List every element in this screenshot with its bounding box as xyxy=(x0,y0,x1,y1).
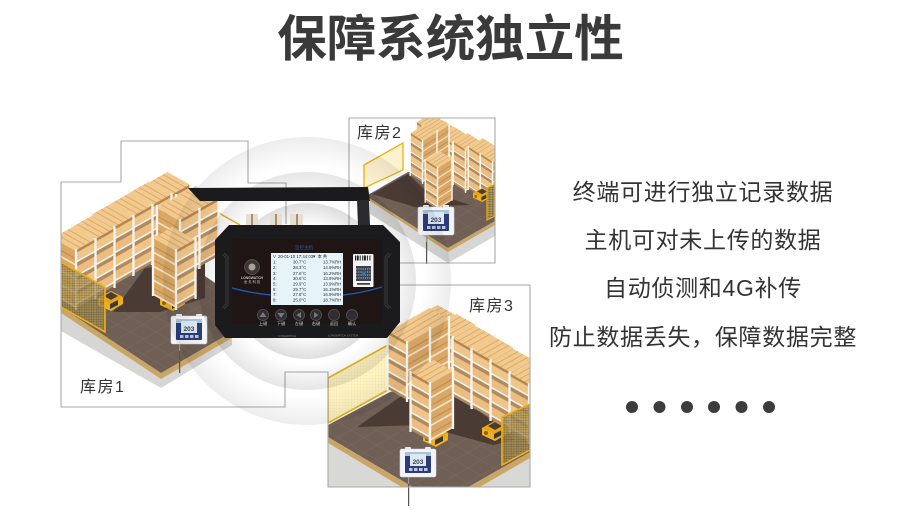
LCD screen: 30.6°C xyxy=(293,276,306,281)
barcode and QR label xyxy=(353,254,374,287)
text block: features: 终端可进行独立记录数据 xyxy=(573,179,833,205)
label: warehouse 1: 库房1 xyxy=(80,378,125,396)
text block: features: 防止数据丢失，保障数据完整 xyxy=(549,324,857,350)
device: central host xyxy=(188,187,400,338)
LCD screen: 18.7%RH xyxy=(323,298,341,302)
front panel xyxy=(232,239,382,324)
logo: 龙 戈 科 技 xyxy=(244,279,261,284)
LCD screen: 25.0°C xyxy=(293,298,306,302)
buttons: 左键 xyxy=(295,320,304,327)
logo xyxy=(241,260,264,284)
panel: warehouse 1 xyxy=(53,172,240,396)
LCD screen: 5: xyxy=(273,282,277,286)
LCD screen: 3: xyxy=(273,271,277,276)
LCD screen: 29.7°C xyxy=(293,287,306,292)
panel: warehouse 2 xyxy=(358,118,494,264)
sensor 3 xyxy=(400,447,436,506)
LCD screen: 13.9%RH xyxy=(323,282,341,286)
buttons: 上键 xyxy=(259,320,268,327)
device body xyxy=(215,225,400,338)
robot xyxy=(473,188,486,202)
LCD screen: ▼ 本 共 xyxy=(312,253,328,260)
warehouse 3 scene xyxy=(328,305,530,486)
fence xyxy=(487,184,495,220)
LCD screen: 16.9%RH xyxy=(323,292,341,297)
warehouse 1 scene xyxy=(53,172,240,388)
buttons: 确认 xyxy=(348,320,357,327)
LCD screen: 13.7%RH xyxy=(323,260,341,264)
buttons: 右键 xyxy=(312,320,321,327)
warehouse 2 scene xyxy=(363,118,494,262)
LCD screen: 1: xyxy=(273,260,277,264)
LCD screen: 20-01-10 17:44:03 xyxy=(278,254,314,259)
connectors xyxy=(246,214,303,226)
title: 保障系统独立性 xyxy=(277,12,624,67)
bottom port labels: LONGWATCH xyxy=(278,334,296,338)
robot xyxy=(98,291,123,311)
LCD screen: 27.8°C xyxy=(293,292,306,297)
fence xyxy=(61,262,105,332)
device name: 监控主机 xyxy=(295,244,313,251)
LCD screen: 6: xyxy=(273,287,277,292)
buttons xyxy=(258,310,358,327)
LCD screen: 7: xyxy=(273,292,277,297)
LCD screen: V xyxy=(273,254,276,259)
buttons: 下键 xyxy=(277,320,286,327)
text block: features: 主机可对未上传的数据 xyxy=(584,227,822,253)
signal rings xyxy=(163,137,451,425)
logo: LONGWATCH xyxy=(241,276,264,280)
LCD screen: 16.2%RH xyxy=(323,271,341,276)
LCD screen: 28.3°C xyxy=(293,265,306,270)
LCD screen: 2: xyxy=(273,265,277,270)
antenna xyxy=(188,187,370,226)
bottom port labels xyxy=(278,334,359,338)
LCD screen xyxy=(271,253,343,305)
LCD screen: 15.1%RH xyxy=(323,287,341,292)
LCD screen: 14.9%RH xyxy=(323,265,341,270)
text block: features: 自动侦测和4G补传 xyxy=(604,275,802,301)
LCD screen: 27.6°C xyxy=(293,271,306,276)
LCD screen: 13.8%RH xyxy=(323,276,341,281)
buttons: 返回 xyxy=(330,320,338,327)
LCD screen: 4: xyxy=(273,276,277,281)
LCD screen: 30.7°C xyxy=(293,260,306,264)
sensor 1 xyxy=(171,314,207,373)
bottom port labels: LONGWATCH SYSTEM xyxy=(328,334,359,338)
text block: features xyxy=(549,179,857,350)
label: warehouse 2: 库房2 xyxy=(357,124,402,142)
pagination dots xyxy=(626,401,775,413)
LCD screen: 29.9°C xyxy=(293,282,306,286)
side vents xyxy=(222,253,391,309)
panel: warehouse 3 xyxy=(328,297,530,506)
robot xyxy=(482,421,507,441)
fence xyxy=(502,404,530,465)
blue accent lines xyxy=(232,287,382,295)
LCD screen: 8: xyxy=(273,298,277,302)
sensor 2 xyxy=(418,205,454,264)
room outlines xyxy=(61,118,530,487)
label: warehouse 3: 库房3 xyxy=(469,297,514,315)
